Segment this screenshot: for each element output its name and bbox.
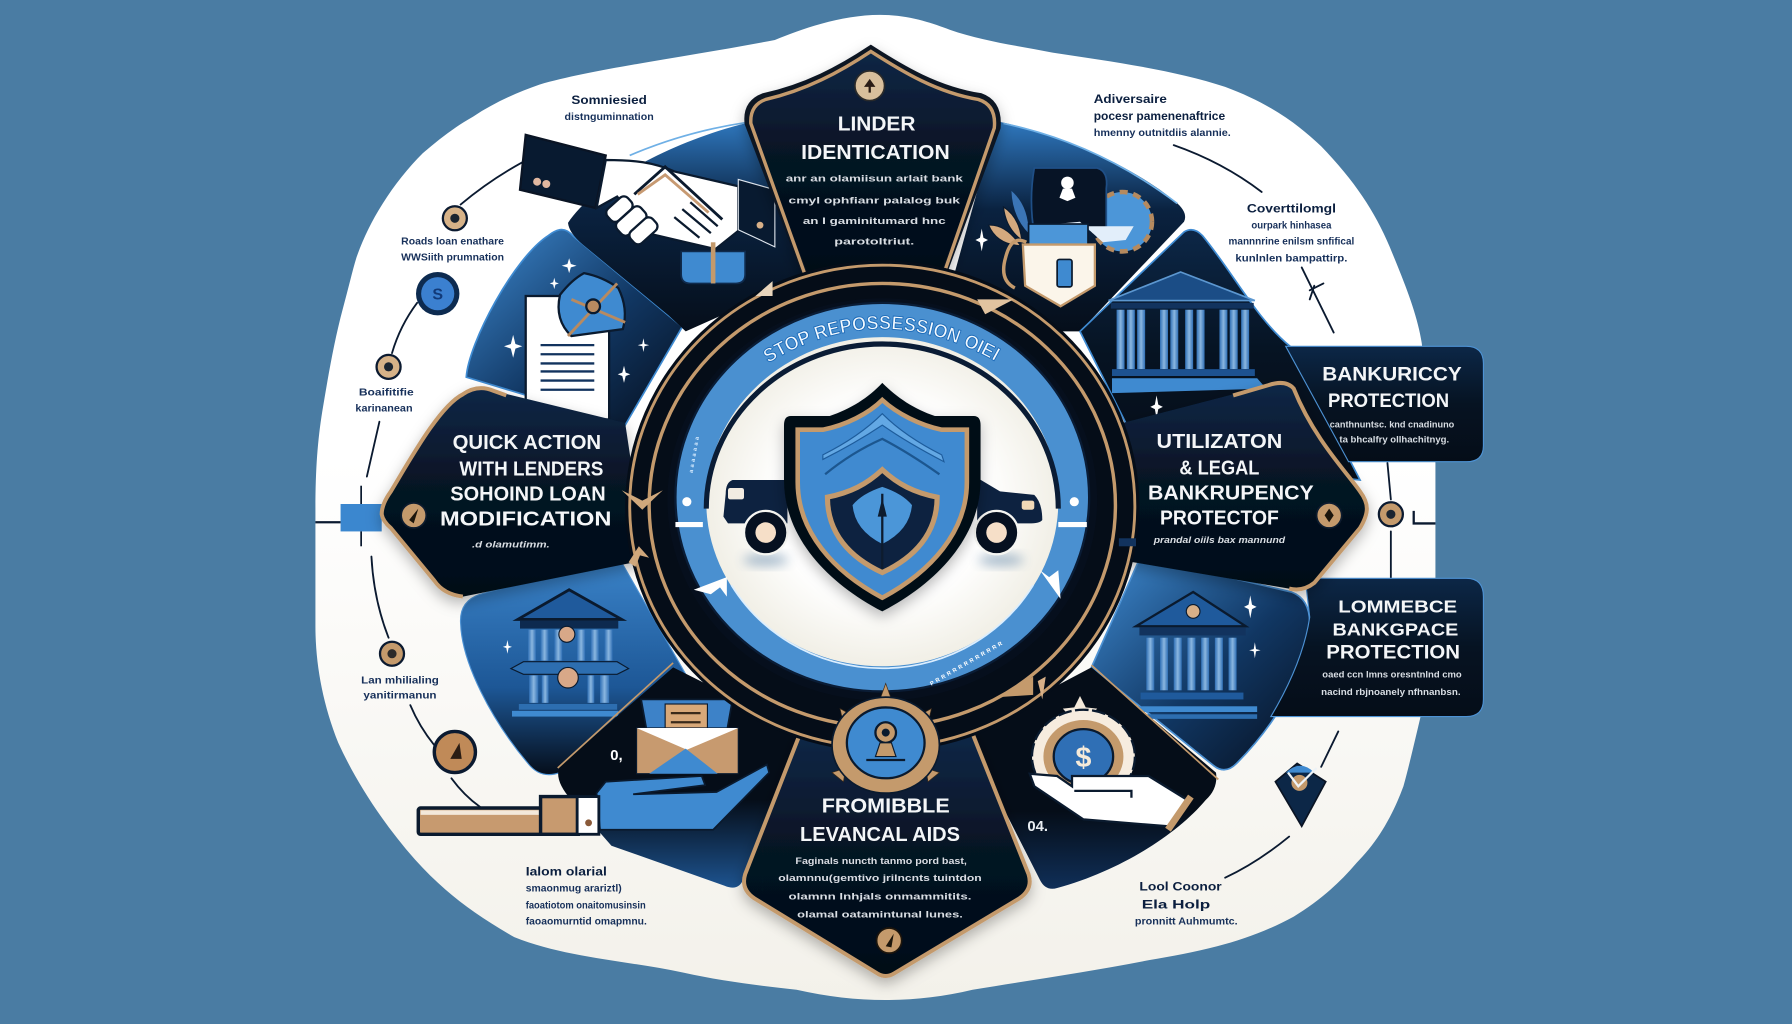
panel: top shield lender identification xyxy=(747,48,998,277)
callout: right upper: Coverttilomgl xyxy=(1247,202,1336,216)
panel: bottom left envelope wedge xyxy=(418,663,806,888)
panel: bankruptcy protection card: canthnuntsc. knd cnadinuno xyxy=(1330,419,1455,429)
panel: bankruptcy protection card: PROTECTION xyxy=(1328,390,1449,412)
callout: left middle: karinanean xyxy=(355,403,413,414)
panel: top shield lender identification: IDENTICATION xyxy=(801,141,950,164)
panel: left plate quick action: MODIFICATION xyxy=(440,508,611,531)
panel: bottom right coin wedge: 04. xyxy=(1027,819,1048,835)
panel: lower right bank wedge xyxy=(1091,557,1310,770)
callout: top left: distnguminnation xyxy=(565,112,654,123)
callout: right upper: mannnrine enilsm snfifical xyxy=(1229,237,1355,248)
panel: left plate quick action: SOHOIND LOAN xyxy=(450,483,606,506)
icon: blue hand with arm xyxy=(418,765,769,834)
panel: lower right protection card: LOMMEBCE xyxy=(1338,597,1457,617)
panel: right plate utilization: PROTECTOF xyxy=(1160,507,1279,530)
callout: left middle xyxy=(355,387,414,414)
panel: bottom shield financial aids: olamnnu(gemtivo jrilncnts tuintdon xyxy=(778,873,982,883)
callout: left middle: Boaifitifie xyxy=(359,387,414,398)
icon: right plate stud xyxy=(1317,503,1342,528)
callout: bottom left: faoaomurntid omapmnu. xyxy=(526,917,647,928)
callout: right upper: kunlnlen bampattirp. xyxy=(1235,254,1348,265)
panel: top shield lender identification: anr an olamiisun arlait bank xyxy=(786,174,964,184)
callout: top right: pocesr pamenenaftrice xyxy=(1094,109,1225,123)
panel: upper right bank wedge xyxy=(1080,230,1360,480)
panel: right plate utilization: BANKRUPENCY xyxy=(1148,481,1314,504)
right tab connector xyxy=(1414,511,1435,523)
white blob backdrop xyxy=(315,15,1435,1000)
icon: coin in hand: $ xyxy=(1075,742,1091,774)
panel: left plate quick action: QUICK ACTION xyxy=(453,431,601,454)
icon: document xyxy=(526,273,625,419)
callout: bottom left xyxy=(526,864,647,928)
callout: right upper: ourpark hinhasea xyxy=(1251,221,1332,232)
panel: lower right protection card xyxy=(1271,578,1483,717)
callout: left upper: WWSiith prumnation xyxy=(401,253,504,264)
panel: lower right protection card: nacind rbjnoanely nfhnanbsn. xyxy=(1321,687,1461,697)
central ring xyxy=(622,264,1140,747)
panel: bottom shield financial aids: olamnn lnhjals onmammitits. xyxy=(789,891,971,901)
panel: bottom shield financial aids xyxy=(744,734,1030,976)
icon: bank lower left xyxy=(511,590,629,717)
panel: lower left bank wedge xyxy=(461,557,686,775)
icon: car behind shield xyxy=(723,478,1042,566)
callout: bottom left: Ialom olarial xyxy=(526,864,607,878)
icon: bank lower right xyxy=(1131,592,1257,719)
panel: bottom shield financial aids: LEVANCAL AIDS xyxy=(800,823,960,846)
panel: top shield lender identification: an I gaminitumard hnc xyxy=(803,216,946,226)
panel: top right gear shield wedge xyxy=(954,121,1185,331)
panel: lower right protection card: BANKGPACE xyxy=(1333,619,1458,639)
panel: right plate utilization: prandal oiils bax mannund xyxy=(1153,535,1286,545)
callout: top left xyxy=(565,93,654,123)
panel: lower right protection card: PROTECTION xyxy=(1326,641,1460,663)
callout: top right xyxy=(1094,92,1231,139)
panel: bottom shield financial aids: Faginals nuncth tanmo pord bast, xyxy=(795,856,967,866)
panel: left plate quick action: WITH LENDERS xyxy=(459,457,603,480)
panel: left plate quick action xyxy=(382,388,646,597)
callout: bottom left: faoatiotom onaitomusinsin xyxy=(526,901,646,912)
callout: bottom right: pronnitt Auhmumtc. xyxy=(1135,917,1238,928)
panel: bottom right coin wedge xyxy=(966,665,1218,889)
connector lines and nodes xyxy=(367,145,1403,878)
icon: left plate stud xyxy=(401,503,426,528)
ring title xyxy=(768,329,999,363)
icon: bottom stud xyxy=(877,928,902,953)
central ring: aaaaaaa xyxy=(689,436,701,473)
callout: left upper xyxy=(401,237,505,264)
panel: lower right protection card: oaed ccn lmns oresntnlnd cmo xyxy=(1322,670,1462,680)
callout: left lower xyxy=(361,675,439,701)
callout: right upper xyxy=(1229,202,1355,265)
panel: bankruptcy protection card: BANKURICCY xyxy=(1322,364,1462,386)
callout: top left: Somniesied xyxy=(571,93,647,107)
panel: right plate utilization: & LEGAL xyxy=(1179,456,1259,479)
icon: top stud xyxy=(855,71,885,101)
callout: left upper: Roads loan enathare xyxy=(401,237,505,248)
icon: bank xyxy=(1109,272,1266,393)
panel: left plate quick action: .d olamutimm. xyxy=(472,539,550,549)
panel: top shield lender identification: cmyl ophfianr palalog buk xyxy=(789,195,961,205)
icon: location pin xyxy=(1275,763,1326,826)
panel: bankruptcy protection card xyxy=(1286,346,1483,462)
panel: bottom shield financial aids: FROMIBBLE xyxy=(822,795,950,818)
panel: bottom left envelope wedge: 0, xyxy=(610,748,623,764)
icon: gear and shield xyxy=(989,168,1152,306)
callout: bottom left: smaonmug arariztl) xyxy=(526,883,622,894)
icon: bottom medallion xyxy=(832,683,939,793)
panel: top shield lender identification: parotoltriut. xyxy=(834,237,914,247)
callout: bottom right: Ela Holp xyxy=(1142,898,1210,912)
icon: coin in hand xyxy=(1030,696,1191,830)
panel: right plate utilization: UTILIZATON xyxy=(1157,430,1282,453)
panel: top shield lender identification: LINDER xyxy=(838,112,916,135)
icon: envelope and money xyxy=(637,699,738,774)
left tab connector xyxy=(315,486,382,546)
central ring: PRRRRRRRRRRRR xyxy=(929,641,1004,687)
callout: left lower: yanitirmanun xyxy=(363,690,437,701)
callout: top right: Adiversaire xyxy=(1094,92,1167,106)
panel: top left handshake wedge xyxy=(520,121,814,331)
callout: left lower: Lan mhilialing xyxy=(361,675,439,686)
panel: right plate utilization xyxy=(1114,383,1367,590)
panel: bankruptcy protection card: ta bhcalfry ollhachitnyg. xyxy=(1339,434,1449,444)
icon: center shield xyxy=(784,383,981,611)
panel: bottom shield financial aids: olamal oatamintunal lunes. xyxy=(797,910,963,920)
callout: bottom right xyxy=(1135,879,1238,928)
callout: bottom right: Lool Coonor xyxy=(1139,879,1222,893)
panel: upper left document wedge xyxy=(466,230,682,425)
icon: blue button: S xyxy=(432,286,443,303)
icon: handshake xyxy=(520,135,775,283)
callout: top right: hmenny outnitdiis alannie. xyxy=(1094,128,1231,139)
icon: blue button xyxy=(416,272,459,315)
